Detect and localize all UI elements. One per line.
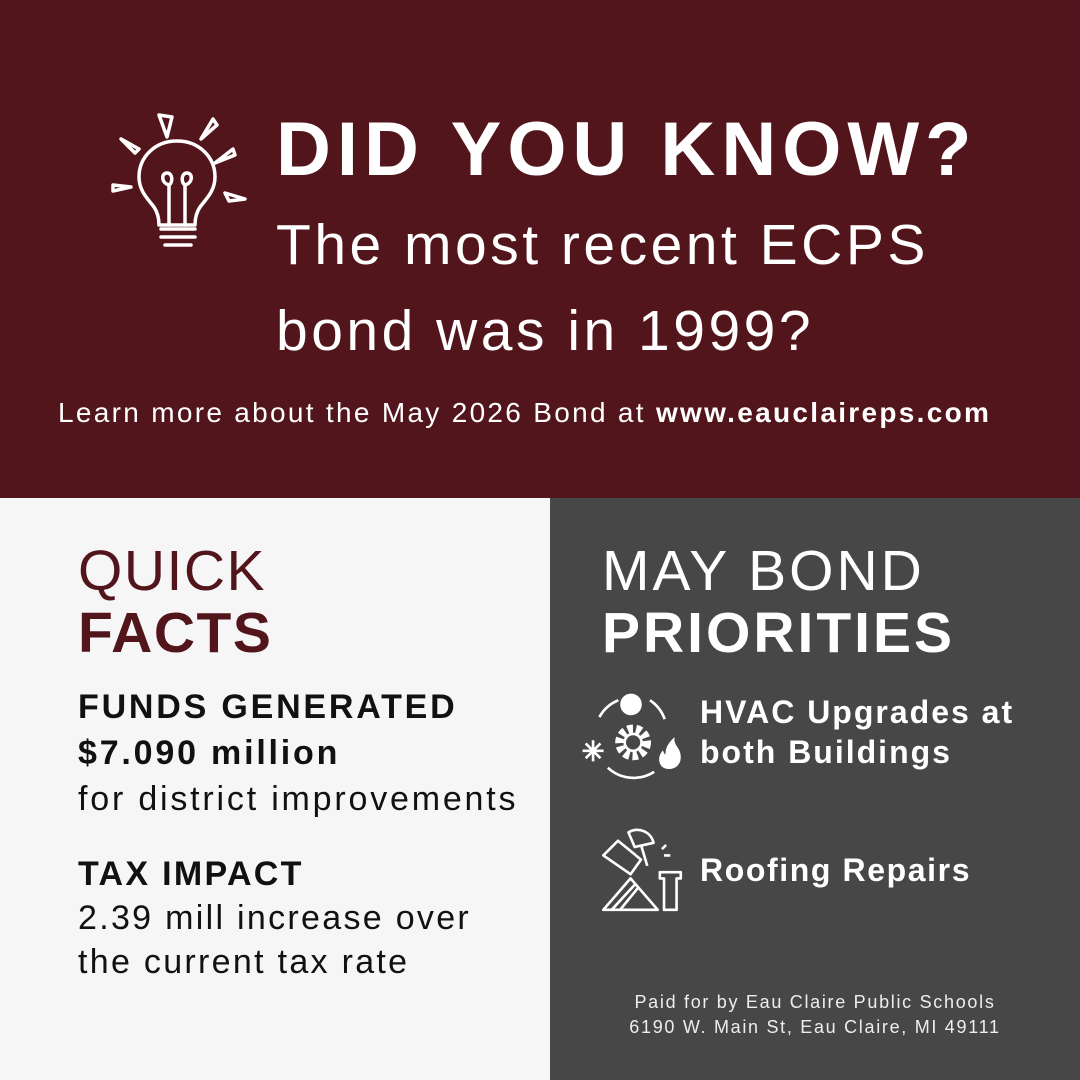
text: hvac: both Buildings <box>700 734 952 770</box>
top banner <box>0 0 1080 498</box>
footer: paid for by: Paid for by Eau Claire Public Schools <box>634 992 996 1012</box>
title: DID YOU KNOW? <box>276 107 977 192</box>
icon: roofing <box>602 828 682 912</box>
text: funds generated: FUNDS GENERATED <box>78 688 458 726</box>
icon: light bulb <box>111 113 247 247</box>
footer: paid for by: 6190 W. Main St, Eau Claire, MI 49111 <box>629 1017 1001 1037</box>
footer: paid for by <box>629 992 1001 1037</box>
subtitle: The most recent ECPS <box>276 213 929 277</box>
heading: priorities <box>602 539 955 665</box>
panel: may bond priorities <box>550 498 1080 1080</box>
link line: Learn more about the May 2026 Bond at www.eauclaireps.com <box>58 397 991 428</box>
icon: hvac <box>582 694 681 780</box>
text: tax impact: 2.39 mill increase over <box>78 899 471 937</box>
text: funds generated: $7.090 million <box>78 734 340 772</box>
subtitle <box>276 213 929 363</box>
heading: priorities: MAY BOND <box>602 539 925 603</box>
text: roofing: Roofing Repairs <box>700 852 971 888</box>
text: tax impact <box>78 855 471 981</box>
panel: quick facts <box>0 498 550 1080</box>
text: hvac <box>700 694 1014 770</box>
text: funds generated <box>78 688 518 818</box>
text: hvac: HVAC Upgrades at <box>700 694 1014 730</box>
text: funds generated: for district improvements <box>78 780 518 818</box>
heading: quick facts <box>78 539 272 665</box>
heading: priorities: PRIORITIES <box>602 601 955 665</box>
text: tax impact: TAX IMPACT <box>78 855 304 893</box>
heading: quick facts: QUICK <box>78 539 266 603</box>
heading: quick facts: FACTS <box>78 601 272 665</box>
subtitle: bond was in 1999? <box>276 299 814 363</box>
text: tax impact: the current tax rate <box>78 943 409 981</box>
